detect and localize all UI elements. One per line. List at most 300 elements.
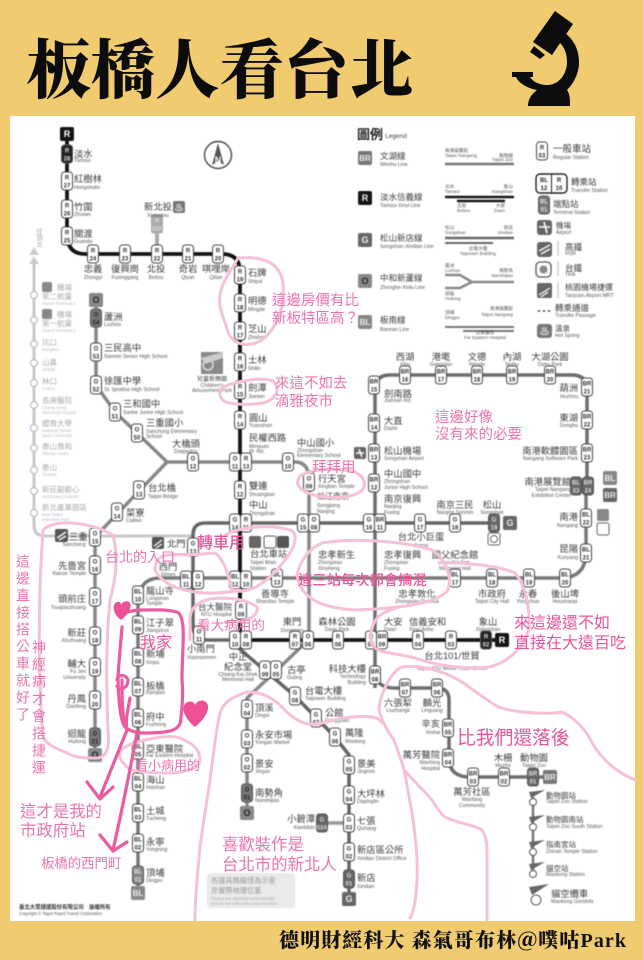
legend: Transfer Passage xyxy=(555,313,596,319)
station labels: north-west: 菜寮 xyxy=(126,507,145,518)
airport line: Airport Terminal 2 xyxy=(42,301,76,306)
station labels: east: Taipei Nangang xyxy=(535,487,571,493)
annotation texts: 市政府站 xyxy=(20,822,86,840)
station labels: west branch: 海山 xyxy=(146,774,165,785)
legend: 10 xyxy=(556,186,563,192)
green line stations: G xyxy=(347,846,352,852)
icon: microscope xyxy=(512,11,579,106)
orange line stations: O xyxy=(243,808,251,818)
green line stations: 03A xyxy=(316,826,328,832)
station labels: north-west: Jiantan xyxy=(248,394,265,400)
station labels: east: Songjiang xyxy=(317,503,340,509)
station labels: east: Dazhi xyxy=(384,426,397,432)
blue line stations: 03 xyxy=(135,816,142,822)
orange line stations: O xyxy=(94,346,99,352)
brown line stations: 22 xyxy=(584,422,591,428)
station labels: central: 公館 xyxy=(325,707,344,718)
legend: R xyxy=(557,178,562,184)
legend: 轉乘通道 xyxy=(555,303,590,313)
annotation texts: 我家 xyxy=(140,634,172,652)
blue line stations: 09 xyxy=(135,628,142,634)
legend: 新店 xyxy=(504,224,513,231)
airport line: National Taiwan xyxy=(42,428,73,433)
station labels: north-west: 中山國小 xyxy=(297,437,335,448)
station labels: east xyxy=(317,351,609,809)
station labels: central: Jingan xyxy=(255,769,270,775)
green line stations: G xyxy=(196,574,201,580)
green line stations: G xyxy=(293,690,298,696)
station labels: east: 中山國中 xyxy=(384,468,421,479)
brown line stations: 02 xyxy=(501,780,508,786)
station labels: central: Xiaonanmen xyxy=(187,655,216,661)
brown line stations: 19 xyxy=(509,378,516,384)
station labels: central: 七張 xyxy=(357,816,376,826)
station labels: east: 行天宮 xyxy=(318,473,346,484)
legend: 動物園 xyxy=(499,152,513,159)
red line stations: 22A xyxy=(151,226,163,232)
orange line stations: 12 xyxy=(190,464,197,470)
green line stations: 12 xyxy=(195,582,202,588)
station labels: east: Hospital xyxy=(421,766,440,772)
station labels: central: Qizhang xyxy=(357,826,376,832)
green line stations: 16 xyxy=(366,526,373,532)
blue line stations: 22 xyxy=(583,520,590,526)
station labels: north-west: Zhishan xyxy=(248,335,267,341)
orange line stations: 51 xyxy=(112,414,119,420)
orange line stations: 17 xyxy=(92,600,99,606)
station labels: east: Taipei Zoo xyxy=(522,763,546,769)
station labels: east: 葫洲 xyxy=(559,382,578,393)
annotation texts: 看小病用的 xyxy=(135,758,200,773)
airport line: 機場 xyxy=(57,309,72,319)
station labels: east: 松山 xyxy=(483,499,501,510)
airport line: 第一航廈 xyxy=(42,318,72,328)
station labels: west branch: Touqianzhuang xyxy=(51,605,86,611)
blue line stations: BL xyxy=(582,548,590,554)
legend: Transfer Station xyxy=(571,188,608,194)
blue line stations: 23 xyxy=(573,488,580,494)
brown line stations: BR xyxy=(544,773,556,782)
blue line stations: 24 xyxy=(585,488,592,494)
station labels: central: Guting xyxy=(287,675,302,681)
station labels: west branch: Yongning xyxy=(146,847,168,853)
brown line stations: BR xyxy=(370,380,379,386)
station labels: east: 國父紀念館 xyxy=(432,549,478,560)
brown line stations: 01 xyxy=(530,780,537,786)
red line stations: R xyxy=(238,484,243,490)
airport line: Industrial Park xyxy=(42,517,70,522)
legend: Xiangshan xyxy=(491,189,513,194)
red line stations: 23 xyxy=(122,256,129,262)
annotation texts: 喜歡裝作是 xyxy=(222,836,304,854)
station labels: central: Xindian District Office xyxy=(357,856,407,862)
legend: 大安 xyxy=(496,202,505,209)
station labels: central: Wanlong xyxy=(345,739,365,745)
station labels: central: 南勢角 xyxy=(255,787,283,798)
gondola line: Taipei Zoo South Station xyxy=(546,824,603,830)
station labels: east: Fuxing xyxy=(384,566,400,572)
station labels: east: Nanjing Sanmin xyxy=(437,510,473,516)
red line stations: G xyxy=(233,634,238,640)
brown line stations: 23 xyxy=(584,456,591,462)
annotation texts: 台北市的新北人 xyxy=(222,856,337,874)
legend: Songshan xyxy=(445,230,466,235)
red line stations: R xyxy=(416,634,421,640)
blue line stations: 05 xyxy=(135,752,142,758)
orange line stations: 21 xyxy=(92,740,99,746)
orange line stations: 18 xyxy=(92,638,99,644)
blue line stations: 07 xyxy=(135,690,142,696)
station labels: central: Station xyxy=(250,566,266,572)
icon: north compass xyxy=(204,142,232,168)
red line stations: 06 xyxy=(335,642,342,648)
legend: Hot Spring xyxy=(555,333,580,339)
copyright: Copyright © Taipei Rapid Transit Corporation xyxy=(19,911,103,916)
legend: Zhonghe-Xinlu Line xyxy=(380,285,425,291)
annotation texts: 板橋的西門町 xyxy=(41,856,121,871)
station labels: east: 港墘 xyxy=(432,351,450,362)
legend: HSR xyxy=(565,251,576,257)
airport line: 體育大學 xyxy=(42,418,72,428)
annotation texts: 沒有來的必要 xyxy=(435,426,522,443)
blue line stations: 18 xyxy=(489,580,496,586)
gondola line: 動物園南站 xyxy=(546,814,584,824)
icon: hot spring Xinbeitou: ♨ xyxy=(174,203,184,213)
station labels: west branch: 三重 xyxy=(69,531,88,542)
station labels: north-west: Shipai xyxy=(248,279,262,285)
green line stations: G xyxy=(418,518,423,524)
station labels: east: 象山 xyxy=(479,616,497,627)
station labels: north-west xyxy=(74,148,341,524)
brown line stations: 17 xyxy=(438,378,445,384)
red line stations: 04 xyxy=(415,642,422,648)
brown line stations: 05 xyxy=(445,730,452,736)
orange line stations: O xyxy=(137,484,142,490)
station labels: west branch: Sanchong xyxy=(62,542,86,548)
orange line stations: G xyxy=(301,518,306,524)
station labels: east: Xinsheng xyxy=(318,566,340,572)
legend: 一般車站 xyxy=(553,143,592,155)
blue line stations: BL xyxy=(605,474,615,483)
legend: 淡水 xyxy=(445,183,455,189)
annotation texts: 來這邊還不如 xyxy=(514,613,610,632)
station labels: east: 麟光 xyxy=(423,697,441,708)
red line stations: R xyxy=(449,634,454,640)
station labels: west branch: Xinzhuang xyxy=(61,638,86,644)
station labels: west branch: 頭前庄 xyxy=(58,593,86,604)
legend: 頂埔 xyxy=(445,309,455,316)
note box: 非實際地理位置 xyxy=(211,886,261,895)
airport line: 山鼻 xyxy=(42,357,57,367)
station labels: east: Zhongshan xyxy=(384,479,410,485)
station labels: east: 木柵 xyxy=(494,752,513,763)
blue line stations: BL xyxy=(451,572,459,578)
station labels: east: 信義安和 xyxy=(409,616,446,627)
station labels: east: 文德 xyxy=(468,351,486,362)
station labels: east: Wanfang xyxy=(462,797,482,803)
footer credit: 德明財經科大 森氣哥布林＠噗咕Park xyxy=(279,928,627,952)
blue line stations: BL xyxy=(273,572,281,578)
legend: 迴龍 xyxy=(445,290,455,297)
red line stations: R xyxy=(244,634,249,640)
station labels: central: Dongmen xyxy=(281,628,303,634)
red line stations: R xyxy=(91,248,96,254)
station labels: east: Zhongxiao Dunhua xyxy=(395,599,439,605)
green line stations: 13 xyxy=(190,550,197,556)
orange line stations: O xyxy=(274,664,279,670)
blue line stations: BL xyxy=(572,480,580,486)
green line stations: 05 xyxy=(346,768,353,774)
station labels: west branch: 亞東醫院 xyxy=(146,743,183,754)
station labels: east: Junior High School xyxy=(384,485,428,491)
red line stations: 13 xyxy=(243,464,250,470)
legend: 端點站 xyxy=(553,199,579,209)
legend: Bannan Line xyxy=(380,327,409,333)
station labels: central: 台電大樓 xyxy=(305,685,342,696)
blue line stations: 01 xyxy=(135,878,142,884)
station labels: east: Memorial Hall xyxy=(439,566,471,572)
station labels: east: Nanjing xyxy=(384,504,402,510)
station labels: central: 小碧潭 xyxy=(287,813,315,824)
station labels: west branch xyxy=(51,529,193,884)
green line stations: G xyxy=(347,760,352,766)
legend: Dingpu xyxy=(445,315,460,320)
station labels: east: Huzhou xyxy=(560,394,578,400)
station labels: west branch: Jiangzicui xyxy=(146,628,169,634)
brown line stations: 13 xyxy=(371,456,378,462)
legend: Legend xyxy=(385,133,407,140)
station labels: east: Kunyang xyxy=(558,555,578,561)
station labels: west branch: 新埔 xyxy=(146,648,165,659)
station labels: north-west: Luzhou xyxy=(104,322,121,328)
orange line stations: O xyxy=(93,662,98,668)
legend: Songshan-Xindian Line xyxy=(380,244,434,250)
station labels: north-west: Yuanshan xyxy=(249,423,272,429)
blue line stations: BL xyxy=(561,572,569,578)
annotation texts xyxy=(15,291,626,874)
station labels: east: 東湖 xyxy=(559,412,578,423)
airport line: 泰山貴和 xyxy=(42,441,72,451)
red line stations: 10 xyxy=(243,582,250,588)
blue line stations: 21 xyxy=(583,556,590,562)
station labels: east: 科技大樓 xyxy=(329,663,366,674)
station labels: north-west: Taipei Bridge xyxy=(148,494,178,500)
legend: 溫泉 xyxy=(555,323,570,333)
blue line stations: 04 xyxy=(135,784,142,790)
brown line stations: BR xyxy=(500,772,509,778)
blue line stations: 17 xyxy=(452,580,459,586)
orange line stations: 52 xyxy=(93,388,100,394)
station labels: east: Daan Park xyxy=(325,627,350,633)
legend: 松山 xyxy=(445,224,455,231)
brown line stations: BR xyxy=(444,722,453,728)
red line stations: 21 xyxy=(185,256,192,262)
legend: Far Eastern Hospital xyxy=(464,335,506,340)
brown line stations: BR xyxy=(529,772,538,778)
brown line stations: 18 xyxy=(474,378,481,384)
station labels: east: Gangqian xyxy=(430,362,452,368)
station labels: north-west: 竹圍 xyxy=(74,201,93,212)
station labels: north-west: Zhuwei xyxy=(74,212,91,218)
brown line stations: BR xyxy=(433,682,442,688)
green line stations: 02 xyxy=(346,854,353,860)
note box: and do not reflect the exact location. xyxy=(211,901,278,906)
station labels: east: Zhongxiao xyxy=(318,560,342,566)
station labels: west branch: 迴龍 xyxy=(67,728,86,739)
red line stations: R xyxy=(336,634,341,640)
red line stations: R xyxy=(155,218,160,224)
brown line stations: BR xyxy=(546,370,555,376)
green line stations: BR xyxy=(376,518,385,524)
station labels: east: Taipei 101/ World Trade Center xyxy=(416,666,488,672)
icon: north compass: N xyxy=(215,155,221,165)
red line stations: 18 xyxy=(237,306,244,312)
station labels: west branch: 土城 xyxy=(146,805,165,816)
gondola line: 貓空站 xyxy=(546,863,569,873)
gondola line xyxy=(529,790,603,905)
station labels: east: 松山機場 xyxy=(384,445,421,456)
brown line stations: 08 xyxy=(372,678,379,684)
red line stations: R xyxy=(238,414,243,420)
airport line: 機場 xyxy=(57,282,72,292)
annotations: light pink doodle outlines xyxy=(39,258,635,920)
station labels: west branch: Haishan xyxy=(146,785,165,791)
green line stations: G xyxy=(345,894,353,904)
station labels: north-west: 蘆洲 xyxy=(104,311,123,322)
red line stations: R xyxy=(186,248,191,254)
legend: 12 xyxy=(541,186,548,192)
station labels: east: 南京復興 xyxy=(384,493,421,504)
brown line stations: BR xyxy=(583,382,592,388)
orange line stations: 10 xyxy=(285,464,292,470)
station labels: north-west: Cailiao xyxy=(126,518,142,524)
orange line stations: O xyxy=(307,476,312,482)
red line stations: R xyxy=(238,298,243,304)
orange line stations: 15 xyxy=(92,540,99,546)
red line stations: R xyxy=(499,635,506,645)
orange line stations: O xyxy=(245,788,250,794)
brown line stations: BR xyxy=(370,418,379,424)
airport line xyxy=(29,227,193,536)
orange line stations: O xyxy=(93,560,98,566)
red line stations: BL xyxy=(231,574,239,580)
orange line stations: O xyxy=(91,750,99,760)
legend: BL xyxy=(540,178,548,184)
blue line stations: BL xyxy=(525,572,533,578)
legend: 桃園機場捷運 xyxy=(565,282,613,292)
legend: 南勢角 xyxy=(499,267,513,274)
red line stations: R xyxy=(238,356,243,362)
orange line stations: O xyxy=(94,380,99,386)
station labels: north-west: St. Ignatius High School xyxy=(104,387,159,393)
station labels: east: Linguang xyxy=(421,708,443,714)
station labels: central: 西門 xyxy=(159,562,177,572)
red line stations: R xyxy=(238,326,243,332)
station labels: central: Nanshijiao xyxy=(255,798,279,804)
legend: Daan xyxy=(494,208,505,213)
station labels: central: 台大醫院 xyxy=(198,602,232,612)
red line stations: 05 xyxy=(368,642,375,648)
annotation: home box and arrows xyxy=(87,610,183,851)
orange line stations: O xyxy=(93,732,98,738)
orange line stations: O xyxy=(93,694,98,700)
airport line: Xinzhuang Fuduxin xyxy=(42,494,79,499)
annotation texts: 神經病才會搭捷運 xyxy=(31,640,47,778)
blue line stations: BL xyxy=(134,620,142,626)
green line stations: 19 xyxy=(491,526,498,532)
brown line stations: BR xyxy=(401,370,410,376)
airport line: Sport University xyxy=(42,433,73,438)
legend: 台鐵 xyxy=(565,263,583,273)
legend: Tamsui xyxy=(445,189,460,194)
station labels: north-west: 台北橋 xyxy=(148,482,177,493)
station labels: west branch: Longshan xyxy=(146,596,169,602)
green line stations: G xyxy=(347,874,352,880)
green line stations: 17 xyxy=(417,526,424,532)
orange line stations: O xyxy=(113,406,118,412)
station labels: north-west: Tamsui xyxy=(74,158,90,164)
brown line stations: 20 xyxy=(547,378,554,384)
airport line: Airport Terminal 1 xyxy=(42,328,76,333)
orange line stations: 20 xyxy=(92,702,99,708)
annotation texts: 這三站每次都會搞混 xyxy=(298,571,427,589)
station labels: east: 辛亥 xyxy=(421,718,440,729)
orange line stations: O xyxy=(245,704,250,710)
station labels: central: Yongan Market xyxy=(255,740,290,746)
station labels: north-west: Fuxinggang xyxy=(111,275,139,281)
station labels: east: 昆陽 xyxy=(559,543,578,554)
red line stations: BR xyxy=(378,634,387,640)
legend: 中和新蘆線 xyxy=(380,273,423,283)
station labels: east: 大安 xyxy=(384,616,403,627)
orange line stations: 03 xyxy=(244,742,251,748)
station labels: central: 北門 xyxy=(167,539,186,549)
blue line stations: BR xyxy=(584,480,593,486)
red line stations: 14 xyxy=(237,422,244,428)
green line stations: G xyxy=(453,518,458,524)
station labels: east: 內湖 xyxy=(503,352,521,362)
station labels: west branch: Xianse Temple xyxy=(52,571,86,577)
station labels: west branch: 輔大 xyxy=(67,658,86,669)
brown line stations: 04 xyxy=(445,760,452,766)
station labels: north-west: 圓山 xyxy=(249,413,268,423)
brown line stations: BR xyxy=(370,478,379,484)
green line stations: G xyxy=(191,542,196,548)
red line stations: 03 xyxy=(448,642,455,648)
legend: ♨ xyxy=(540,326,550,338)
legend: Tamsui-Xinyi Line xyxy=(380,203,421,209)
station labels: central: Memorial Hall xyxy=(222,677,254,683)
green line stations: G xyxy=(506,518,514,528)
blue line stations: BL xyxy=(134,712,142,718)
red line stations: 14 xyxy=(232,526,239,532)
station labels: central: 台北車站 xyxy=(250,548,287,559)
red line stations: 19 xyxy=(237,278,244,284)
legend: 亞東醫院 xyxy=(476,329,495,336)
green line stations: 04 xyxy=(346,798,353,804)
airport line: 林口 xyxy=(42,376,57,386)
brown line stations: 06 xyxy=(434,690,441,696)
copyright: 臺北大眾捷運股份有限公司 版權所有 xyxy=(19,903,111,911)
red line stations: O xyxy=(233,456,238,462)
green line stations: G xyxy=(320,818,325,824)
station labels: north-west: Shilin xyxy=(248,366,261,372)
orange line stations: O xyxy=(245,734,250,740)
station labels: central: 頂溪 xyxy=(255,702,274,713)
green line stations: 07 xyxy=(313,720,320,726)
blue line stations: 19 xyxy=(526,580,533,586)
airport line: 第二航廈 xyxy=(42,291,72,301)
